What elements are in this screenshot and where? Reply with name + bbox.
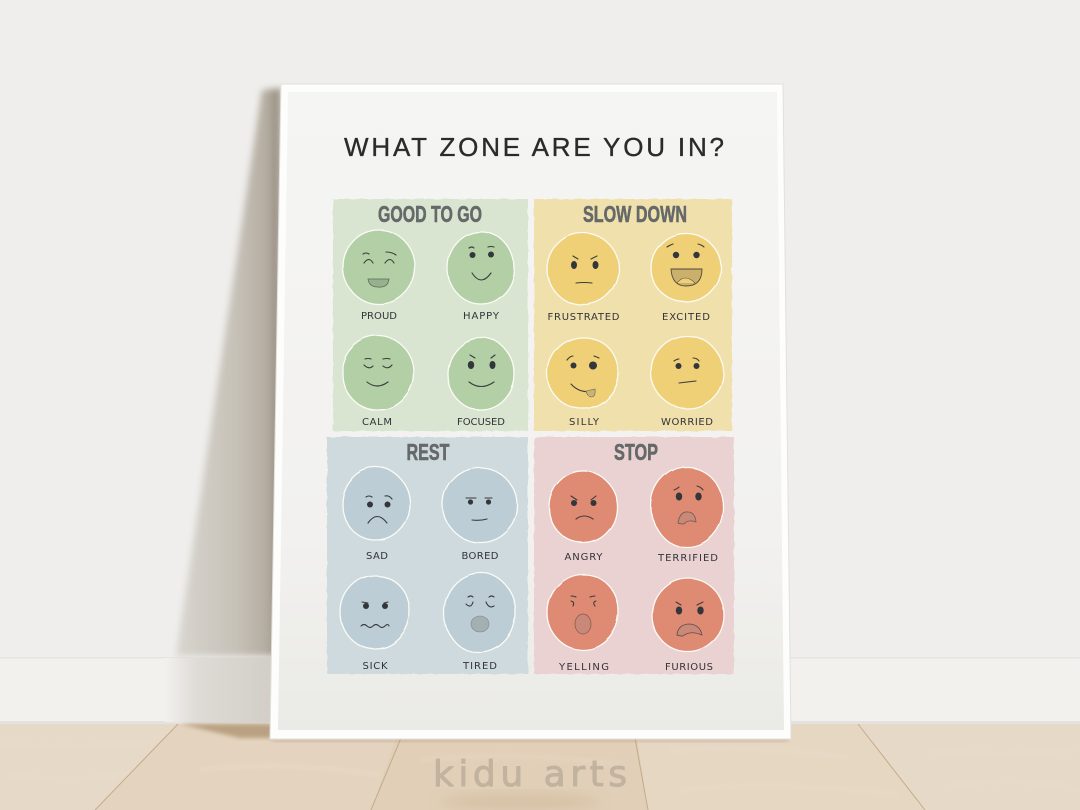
label: sick: SICK [362, 661, 388, 672]
label: sad: SAD [366, 551, 388, 562]
label: worried: WORRIED [661, 417, 713, 428]
label: proud: PROUD [361, 311, 397, 322]
label: focused: FOCUSED [457, 417, 505, 428]
heading: good to go: GOOD TO GO [378, 201, 482, 227]
frame shadow on wall [176, 88, 281, 656]
face: worried [651, 336, 723, 428]
frame shadow on floor [180, 724, 272, 738]
label: terrified: TERRIFIED [657, 553, 718, 564]
label: frustrated: FRUSTRATED [548, 312, 620, 323]
label: bored: BORED [462, 551, 499, 562]
heading: stop: STOP [614, 439, 658, 465]
panel: good to go [333, 199, 528, 431]
label: angry: ANGRY [564, 552, 603, 563]
label: calm: CALM [362, 417, 392, 428]
label: furious: FURIOUS [665, 662, 713, 673]
face: sick [340, 575, 410, 672]
face: proud [343, 230, 415, 322]
frame shadow on baseboard [165, 658, 272, 722]
label: happy: HAPPY [463, 311, 500, 322]
face: focused [448, 338, 514, 428]
label: tired: TIRED [462, 661, 497, 672]
label: yelling: YELLING [558, 662, 609, 673]
face: terrified [651, 467, 723, 564]
face: yelling [547, 574, 619, 673]
heading: slow down: SLOW DOWN [583, 201, 687, 227]
face: sad [342, 468, 410, 562]
heading: rest: REST [406, 439, 450, 465]
poster frame [270, 84, 791, 739]
face: angry [549, 471, 617, 563]
wood floor [0, 724, 1080, 810]
face: calm [342, 336, 414, 428]
face: frustrated [547, 233, 620, 323]
face: bored [443, 468, 517, 562]
title: WHAT ZONE ARE YOU IN? [344, 132, 724, 162]
panel: stop [534, 437, 734, 674]
watermark: kidu arts: kidu arts [433, 754, 627, 795]
label: silly: SILLY [569, 417, 600, 428]
face: tired [444, 573, 516, 672]
face: happy [448, 232, 514, 322]
face: furious [652, 578, 724, 673]
panel: rest [327, 437, 528, 674]
face: silly [547, 337, 619, 428]
baseboard [0, 657, 1080, 724]
label: excited: EXCITED [662, 312, 710, 323]
poster mat [278, 92, 784, 730]
panel: slow down [534, 199, 732, 431]
face: excited [651, 234, 721, 323]
